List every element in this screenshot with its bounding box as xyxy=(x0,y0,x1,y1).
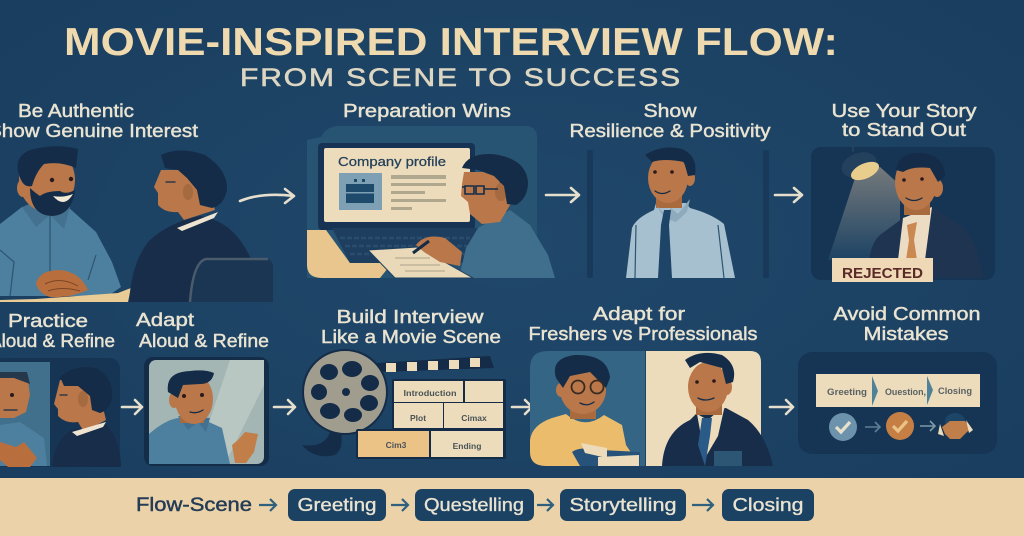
panel: use your story illustration xyxy=(811,136,995,282)
step: greeting: Greeting xyxy=(298,494,376,515)
fresher with glasses xyxy=(530,355,640,466)
film strip xyxy=(377,356,494,372)
speaking man xyxy=(149,370,258,464)
heading: be authentic: Be Authentic xyxy=(18,101,134,121)
notepad xyxy=(368,247,473,278)
title xyxy=(64,21,838,92)
panel: practice illustration xyxy=(0,358,121,467)
heading: use your story xyxy=(832,101,976,140)
company profile screen xyxy=(324,148,470,222)
scene cards xyxy=(356,379,506,459)
flow strip xyxy=(136,489,814,521)
heading: adapt for freshers: Adapt for xyxy=(593,304,685,324)
icon: check circle blue xyxy=(829,413,857,441)
heading: preparation wins: Preparation Wins xyxy=(343,101,511,121)
heading: avoid common mistakes: Mistakes xyxy=(864,324,948,344)
panel: movie scene xyxy=(302,350,506,459)
heading: practice xyxy=(0,311,115,351)
rejected sign xyxy=(832,258,933,282)
panel: freshers vs professionals xyxy=(530,351,773,466)
icon: handshake xyxy=(938,413,973,439)
man in suit xyxy=(868,153,983,278)
arrow: 8 to 9 xyxy=(770,400,793,414)
heading: adapt aloud: Adapt xyxy=(136,310,194,330)
heading: show resilience: Show xyxy=(644,101,698,121)
scene cards: Cimax xyxy=(461,413,487,423)
scene cards: Introduction xyxy=(404,388,456,398)
man in mirror xyxy=(0,372,47,467)
arrow: 7 to 8 xyxy=(512,400,532,414)
heading: avoid common mistakes xyxy=(834,304,980,344)
heading: build interview: Like a Movie Scene xyxy=(321,327,501,347)
step: closing: Closing xyxy=(732,494,804,515)
panel: preparation wins illustration xyxy=(307,126,555,278)
flow strip: Flow-Scene xyxy=(136,495,252,516)
process bar: Closing xyxy=(938,386,972,396)
scene cards: Cim3 xyxy=(386,440,407,450)
heading: avoid common mistakes: Avoid Common xyxy=(834,304,980,324)
panel: adapt illustration xyxy=(144,357,269,466)
heading: build interview: Build Interview xyxy=(336,307,485,327)
process bar: Greeting xyxy=(827,387,867,397)
title: MOVIE-INSPIRED INTERVIEW FLOW: xyxy=(64,21,838,64)
arrow: 5 to 6 xyxy=(122,400,142,414)
heading: build interview xyxy=(321,307,501,347)
panel: be authentic illustration xyxy=(0,146,273,302)
heading: be authentic xyxy=(0,101,198,141)
smiling man with beard xyxy=(0,146,131,302)
company profile screen: Company profile xyxy=(338,154,446,169)
heading: adapt aloud: Aloud & Refine xyxy=(139,331,269,351)
lamp xyxy=(838,136,882,184)
arrow: 2 to 3 xyxy=(546,188,579,202)
man from behind in suit xyxy=(129,150,273,302)
title: FROM SCENE TO SUCCESS xyxy=(240,64,682,92)
heading: use your story: Use Your Story xyxy=(832,101,976,121)
laptop xyxy=(318,143,475,230)
arrow: 1 to 2 xyxy=(240,189,294,203)
man in shirt and tie xyxy=(626,147,735,278)
rejected sign: REJECTED xyxy=(842,266,923,282)
heading: practice: Practice xyxy=(8,311,88,331)
film reel xyxy=(303,350,387,434)
hand and pen xyxy=(416,237,462,266)
heading: adapt aloud xyxy=(136,310,269,351)
icon: check circle orange xyxy=(886,412,914,440)
heading: show resilience: Resilience & Positivity xyxy=(570,121,770,141)
bottom band xyxy=(0,478,1024,536)
text lines xyxy=(391,175,446,210)
arrow: 6 to 7 xyxy=(274,400,295,414)
scene cards: Ending xyxy=(453,441,481,451)
chair xyxy=(189,258,273,302)
briefcase icon xyxy=(339,173,382,210)
step: storytelling xyxy=(560,489,686,521)
step: closing xyxy=(722,489,814,521)
professional in suit xyxy=(662,353,773,466)
step: greeting xyxy=(288,489,386,521)
desk xyxy=(307,230,392,278)
arrow: 3 to 4 xyxy=(775,188,802,202)
man in profile xyxy=(52,367,121,467)
step: questelling xyxy=(415,489,534,521)
panel: avoid common mistakes xyxy=(798,352,997,454)
step: questelling: Questelling xyxy=(424,494,524,515)
process bar: Ouestion, xyxy=(885,387,926,397)
panel: show resilience illustration xyxy=(587,147,769,278)
step: storytelling: Storytelling xyxy=(570,494,676,515)
process bar xyxy=(816,374,980,407)
heading: use your story: to Stand Out xyxy=(842,120,966,140)
heading: adapt for freshers: Freshers vs Professionals xyxy=(528,324,758,344)
spotlight beam xyxy=(828,167,900,260)
scene cards: Plot xyxy=(410,413,426,423)
heading: adapt for freshers xyxy=(528,304,758,344)
man with glasses xyxy=(368,154,555,278)
heading: show resilience xyxy=(570,101,770,141)
table xyxy=(0,288,131,302)
